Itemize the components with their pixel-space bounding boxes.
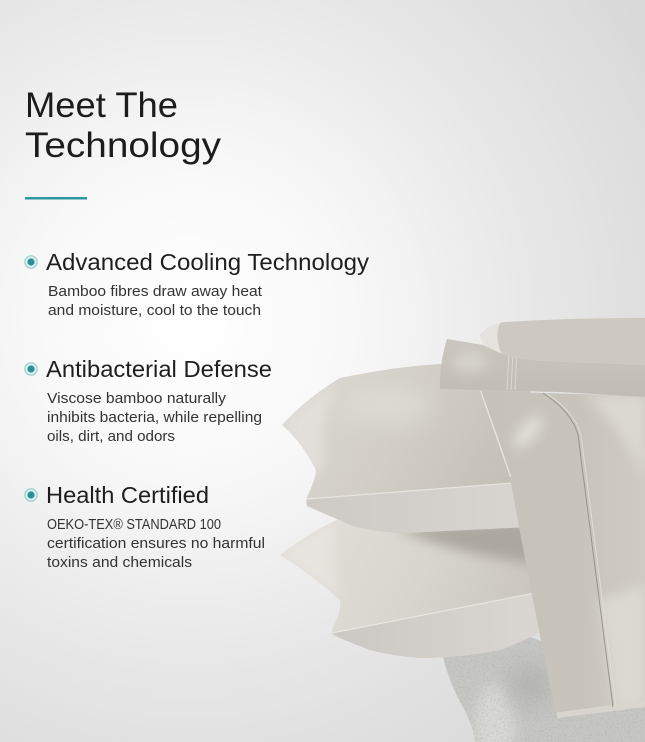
text: advanced cooling description: and moisture, cool to the touch [48, 303, 261, 319]
title: Meet The [25, 86, 178, 125]
title: Technology [25, 126, 222, 165]
icon: teal bullet [25, 256, 37, 268]
feature: advanced cooling [25, 249, 370, 319]
text: health certified description: certification ensures no harmful [47, 536, 265, 552]
feature: antibacterial [25, 356, 272, 445]
text: health certified description [47, 517, 265, 571]
icon: teal bullet [25, 363, 37, 375]
heading: health certified: Health Certified [46, 482, 209, 508]
heading: antibacterial: Antibacterial Defense [46, 356, 272, 382]
text: advanced cooling description [48, 284, 262, 319]
title accent rule [25, 197, 87, 200]
icon: teal bullet [25, 489, 37, 501]
lower pillow flap [334, 594, 540, 656]
title [25, 86, 222, 165]
text: antibacterial description: Viscose bamboo naturally [47, 391, 227, 407]
lower pillow [280, 520, 540, 658]
text: advanced cooling description: Bamboo fibres draw away heat [48, 284, 262, 300]
text: antibacterial description [47, 391, 262, 445]
feature: health certified [25, 482, 265, 571]
text: antibacterial description: oils, dirt, and odors [47, 429, 175, 445]
text: antibacterial description: inhibits bacteria, while repelling [47, 410, 262, 426]
cuff band [440, 339, 645, 397]
heading: advanced cooling: Advanced Cooling Technology [46, 249, 370, 275]
folded sheets [435, 318, 645, 400]
upper pillow [282, 364, 530, 533]
stone stool [440, 630, 645, 742]
draped sheet [475, 385, 645, 725]
photo: bedding stack on stone stool [275, 318, 645, 742]
top roll inner highlight [480, 323, 502, 354]
upper pillow flap [306, 484, 519, 533]
top roll [480, 318, 645, 365]
text: health certified description: OEKO-TEX® STANDARD 100 [47, 517, 221, 533]
text: health certified description: toxins and chemicals [47, 555, 192, 571]
